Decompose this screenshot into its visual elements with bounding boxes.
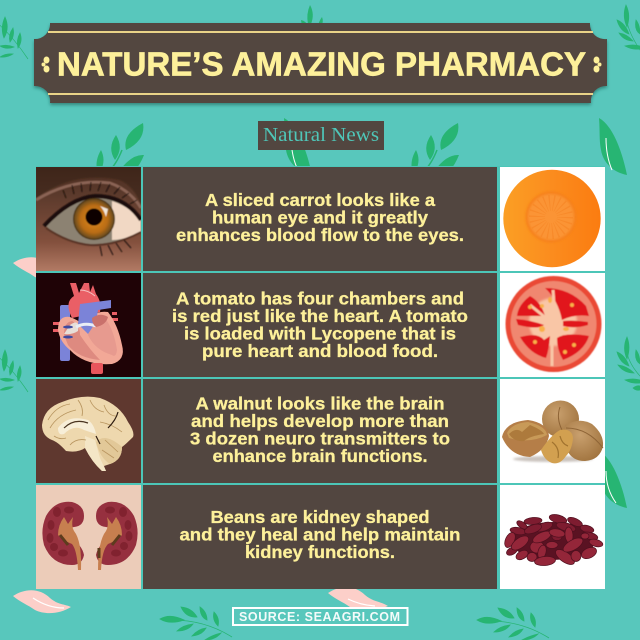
panel: row 2 heart image	[36, 273, 141, 377]
panel: row 2 text: pure heart and blood food.	[202, 341, 438, 361]
icon: sprig top right	[617, 5, 640, 58]
panel: row 4 text: Beans are kidney shaped	[210, 507, 430, 527]
icon: sprig top center	[301, 5, 323, 26]
panel: row 3 brain image	[36, 379, 141, 483]
panel: row 1 carrot image	[500, 167, 605, 271]
panel: row 2 text: is loaded with Lycopene that is	[184, 324, 456, 344]
panel: row 1 text: enhances blood flow to the eyes.	[176, 225, 464, 245]
icon: pink leaf bottom center	[328, 587, 388, 610]
panel: row 1 text	[143, 167, 497, 271]
panel: row 4 text: kidney functions.	[245, 542, 395, 562]
icon: right kidney	[96, 502, 138, 570]
icon: large leaf center	[284, 118, 312, 175]
panel: row 3 text: and helps develop more than	[191, 411, 449, 431]
panel: row 3 walnut image	[500, 379, 605, 483]
panel: row 3 text: 3 dozen neuro transmitters to	[190, 428, 450, 448]
icon: sprig bottom right	[477, 608, 549, 640]
panel: row 4 kidney image	[36, 485, 141, 589]
panel: row 1 text: A sliced carrot looks like a	[205, 190, 435, 210]
icon: sprig near badge left	[96, 123, 144, 172]
panel: row 2 text	[143, 273, 497, 377]
panel: row 4 text	[143, 485, 497, 589]
panel: row 3 text	[143, 379, 497, 483]
panel: row 1 eye image	[36, 167, 141, 271]
icon: pink leaf upper left	[13, 257, 50, 281]
title banner	[34, 23, 607, 103]
panel: row 3 text: A walnut looks like the brain	[196, 394, 444, 414]
panel: row 2 tomato image	[500, 273, 605, 377]
panel: row 4 beans image	[500, 485, 605, 589]
source label: SOURCE: SEAAGRI.COM	[239, 610, 400, 624]
table grid backing	[36, 166, 605, 589]
icon: large leaf top right	[599, 118, 627, 175]
badge: Natural News	[258, 121, 384, 150]
icon: large leaf lower right	[599, 451, 627, 508]
icon: sprig mid left	[0, 350, 28, 392]
panel: row 3 text: enhance brain functions.	[212, 446, 428, 466]
panel: row 2 text: A tomato has four chambers and	[176, 288, 464, 308]
icon: ornament left	[42, 56, 50, 72]
panel: row 4 text: and they heal and help maintain	[180, 524, 460, 544]
panel: row 2 text: is red just like the heart. A tomato	[172, 306, 468, 326]
panel: row 1 text: human eye and it greatly	[212, 208, 428, 228]
badge: Natural News: Natural News	[263, 124, 379, 146]
icon: sprig near badge right	[412, 123, 459, 172]
title: NATURE’S AMAZING PHARMACY	[57, 46, 586, 82]
icon: pink leaf lower left	[13, 590, 71, 613]
icon: ornament right	[594, 56, 602, 72]
icon: sprig bottom left	[160, 607, 232, 640]
icon: sprig mid right	[617, 337, 640, 390]
icon: left kidney	[42, 502, 84, 570]
icon: sprig top left	[0, 17, 28, 59]
